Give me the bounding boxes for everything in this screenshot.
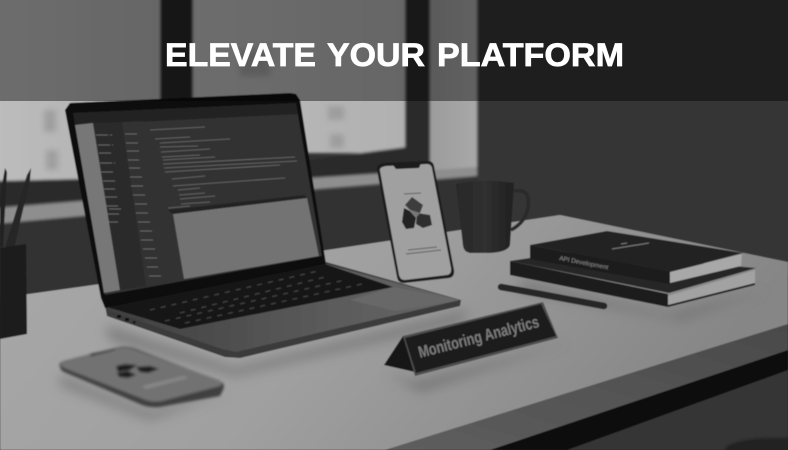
- chair shape on floor: [725, 438, 788, 450]
- book cover label: [612, 243, 649, 249]
- title: YOUR: [327, 37, 425, 73]
- pencil holder with pencils: [0, 168, 31, 339]
- laptop front edge: [105, 262, 461, 358]
- title: PLATFORM: [437, 37, 624, 73]
- phone standing: [377, 161, 454, 283]
- terminal pane: [173, 198, 319, 279]
- laptop: [65, 93, 461, 358]
- title: ELEVATE: [165, 37, 316, 73]
- upper book: [530, 231, 743, 284]
- keyboard well: [104, 264, 393, 329]
- coffee mug: [456, 181, 528, 253]
- phone notch: [393, 163, 421, 169]
- phone body: [377, 161, 454, 283]
- editor menu bar: [73, 103, 298, 125]
- cube logo on back of phone: [116, 364, 159, 378]
- name plate text: Monitoring Analytics: [416, 313, 541, 362]
- laptop touchpad: [350, 287, 460, 311]
- desk top surface: [0, 215, 788, 450]
- left gray sidebar: [75, 123, 120, 293]
- name plate: Monitoring Analytics: [384, 302, 558, 376]
- floor: [567, 370, 788, 450]
- shadows on desk: [60, 280, 770, 420]
- phone screen text lines: [404, 193, 441, 254]
- palm rest: [107, 264, 460, 352]
- pen: [501, 287, 604, 306]
- blurred buildings outside the window: [44, 50, 344, 170]
- file tree rows: [96, 134, 161, 276]
- code editor window: [73, 103, 322, 295]
- desk front edge: [385, 324, 788, 450]
- laptop ports: [117, 315, 136, 324]
- top banner overlay: [0, 0, 788, 101]
- cube logo on phone: [402, 197, 432, 229]
- phone screen: [380, 164, 451, 280]
- stacked books: [510, 231, 756, 307]
- phone lying on desk: [60, 347, 224, 407]
- desk black underside: [490, 349, 788, 450]
- laptop base: [104, 262, 461, 358]
- book spine label: API Development: [559, 255, 609, 271]
- lower book: [510, 252, 756, 307]
- laptop screen bezel: [65, 93, 326, 308]
- code lines: [150, 127, 297, 208]
- desk: [0, 215, 788, 450]
- file tree column: [93, 122, 146, 290]
